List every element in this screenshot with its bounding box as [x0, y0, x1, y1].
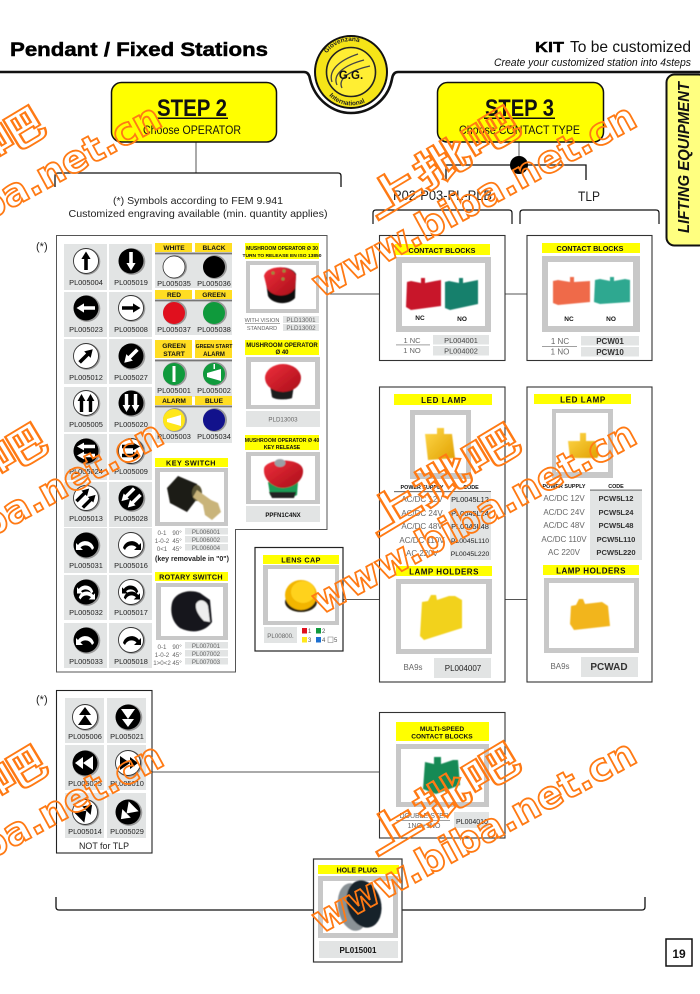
panel: LED lamp and holders standard: LAMP HOLDERS [409, 568, 479, 576]
panel: contact blocks standard: 1 NC [403, 336, 421, 345]
panel: multi-speed contact blocks: DOUBLE STEP [399, 813, 449, 820]
connector lines [152, 142, 527, 772]
panel: LED lamp and holders standard: AC/DC 48V [401, 522, 443, 531]
header rule curving around logo [0, 72, 700, 113]
panel: contact blocks TLP: NC [564, 316, 574, 323]
step 2 box: Choose OPERATOR [143, 123, 241, 137]
colour buttons: PL005001 [157, 386, 191, 395]
panel: hole plug: PL015001 [340, 946, 377, 955]
panel: LED lamp and holders standard: PL0045L12 [451, 495, 489, 504]
side tab: lifting equipment [666, 74, 700, 246]
symbol codes: PL005032 [69, 608, 103, 617]
panel: lens cap: PL00800. [267, 633, 294, 640]
step 2 note: Customized engraving available (min. quantity applies) [68, 208, 328, 220]
panel: contact blocks TLP: CONTACT BLOCKS [557, 244, 624, 253]
symbol codes: PL005031 [69, 561, 103, 570]
panel: operators [56, 236, 327, 672]
symbol codes: PL005019 [114, 278, 148, 287]
colour buttons: RED [167, 292, 181, 299]
rotary switch: 0-1 [158, 644, 167, 651]
panel: contact blocks standard: NO [457, 316, 467, 323]
watermark top right: www.biba.net.cn [304, 95, 643, 306]
panel: LED lamp and holders standard: PL0045L110 [451, 538, 489, 545]
panel: contact blocks standard: NC [415, 315, 425, 322]
watermark bottom right: 上批吧 [351, 726, 530, 867]
panel: LED lamp and holders TLP: BA9s [550, 662, 570, 671]
panel: LED lamp and holders standard: POWER SUPPLY [401, 485, 444, 491]
watermark top right: 上批吧 [351, 90, 530, 231]
panel: lens cap: 3 [308, 638, 312, 644]
kit heading: To be customized [570, 39, 691, 56]
logo: Giovenzana [324, 38, 360, 52]
symbol codes: PL005023 [69, 325, 103, 334]
rotary switch: PL007003 [192, 659, 221, 666]
panel: not for TLP symbols: PL005025 [68, 779, 102, 788]
step 2 box: STEP 2 [157, 95, 227, 122]
symbol codes: PL005013 [69, 514, 103, 523]
colour buttons: PL005034 [197, 432, 231, 441]
panel: LED lamp and holders TLP: LAMP HOLDERS [556, 566, 626, 576]
panel: LED lamp and holders standard: CODE [463, 485, 479, 491]
key switch: KEY SWITCH [166, 458, 216, 468]
panel: LED lamp and holders TLP: AC/DC 24V [543, 508, 585, 517]
step 2 bracket [55, 173, 341, 187]
symbol codes: PL005018 [114, 657, 148, 666]
symbol codes: PL005017 [114, 608, 148, 617]
panel: LED lamp and holders TLP [527, 387, 652, 682]
rotary switch: 45° [172, 660, 182, 667]
colour buttons: BLACK [202, 245, 226, 252]
rotary switch: PL007002 [192, 651, 221, 658]
mushroom operator 40: MUSHROOM OPERATOR [246, 343, 318, 349]
mushroom key release: KEY RELEASE [264, 445, 301, 451]
panel: contact blocks TLP: 1 NC [551, 337, 569, 346]
panel: contact blocks TLP: NO [606, 316, 616, 323]
rotary switch: 1>0<2 [153, 660, 171, 667]
key switch: 45° [172, 546, 182, 553]
panel: LED lamp and holders TLP: LED LAMP [560, 396, 606, 404]
colour buttons: PL005035 [157, 279, 191, 288]
panel: LED lamp and holders TLP: AC/DC 12V [543, 494, 585, 503]
colour buttons: PL005002 [197, 386, 231, 395]
panel: not for TLP symbols: PL005029 [110, 827, 144, 836]
rotary switch [153, 572, 228, 667]
panel: not for TLP symbols: PL005006 [68, 732, 102, 741]
panel: multi-speed contact blocks: 1NO+1NO [408, 823, 441, 830]
panel: not for TLP symbols: PL005010 [110, 779, 144, 788]
panel: lens cap: LENS CAP [281, 556, 321, 564]
step 3 box [438, 82, 604, 142]
mushroom operator 30 [242, 243, 322, 332]
panel: multi-speed contact blocks: MULTI-SPEED [420, 726, 464, 733]
panel: hole plug: HOLE PLUG [337, 868, 378, 874]
panel: contact blocks TLP [527, 236, 652, 360]
panel: not for TLP symbols: PL005014 [68, 827, 102, 836]
key switch: PL006002 [192, 537, 221, 544]
mushroom operator 40: Ø 40 [275, 350, 289, 356]
panel: lens cap: 2 [322, 629, 326, 635]
panel: hole plug [314, 859, 402, 962]
sub brackets [373, 210, 659, 224]
key switch: PL006004 [192, 545, 221, 552]
symbol codes: PL005027 [114, 373, 148, 382]
mushroom operator 40: PLD13003 [268, 416, 298, 424]
symbol codes: PL005033 [69, 657, 103, 666]
mushroom operator 30: PLD13001 [286, 317, 316, 324]
kit heading [494, 39, 691, 69]
step 2 box [112, 82, 276, 142]
mushroom operator 30: MUSHROOM OPERATOR Ø 30 [246, 246, 318, 252]
key switch: 0<1 [157, 546, 168, 553]
colour buttons: BLUE [205, 398, 224, 405]
label: TLP: TLP [578, 188, 600, 204]
label: P02-P03-PL-PLB: P02-P03-PL-PLB [393, 187, 492, 203]
rotary switch: 1-0-2 [155, 652, 170, 659]
asterisk note lower: (*) [36, 694, 48, 706]
panel: multi-speed contact blocks [380, 712, 505, 838]
colour buttons: PL005037 [157, 325, 191, 334]
rotary switch: ROTARY SWITCH [159, 572, 223, 582]
panel: LED lamp and holders standard: AC/DC 12V [401, 495, 443, 504]
mushroom operator 30: PLD13002 [286, 325, 316, 332]
step 2 note: (*) Symbols according to FEM 9.941 [113, 195, 283, 207]
panel: LED lamp and holders standard: AC/DC 24V [401, 509, 443, 518]
mushroom key release [245, 435, 320, 522]
panel: LED lamp and holders standard: PL0045L220 [451, 551, 489, 558]
kit heading: Create your customized station into 4steps [494, 57, 691, 69]
panel: LED lamp and holders TLP: CODE [608, 484, 624, 490]
panel: contact blocks standard: PL004001 [444, 336, 478, 345]
kit heading: KIT [535, 40, 564, 56]
mushroom operator 30: WITH VISION [245, 318, 279, 324]
panel: multi-speed contact blocks: CONTACT BLOCKS [411, 734, 473, 740]
panel: lens cap: 1 [308, 629, 312, 635]
key switch: 0-1 [158, 530, 167, 537]
panel: LED lamp and holders TLP: PCW5L12 [598, 494, 634, 503]
key switch: 45° [172, 538, 182, 545]
mushroom key release: MUSHROOM OPERATOR Ø 40 [245, 438, 319, 444]
panel: LED lamp and holders TLP: PCW5L48 [598, 521, 634, 530]
side tab: lifting equipment: LIFTING EQUIPMENT [676, 81, 693, 233]
symbol codes: PL005004 [69, 278, 103, 287]
symbol codes: PL005020 [114, 420, 148, 429]
panel: LED lamp and holders standard: LED LAMP [421, 396, 467, 405]
panel: not for TLP symbols [56, 690, 152, 853]
asterisk note upper: (*) [36, 241, 48, 253]
symbol codes: PL005008 [114, 325, 148, 334]
key switch: 90° [172, 530, 182, 537]
page number: 19 [672, 947, 686, 961]
symbol codes: PL005005 [69, 420, 103, 429]
panel: contact blocks standard [380, 236, 505, 360]
mushroom operator 30: TURN TO RELEASE EN ISO 13850 [242, 253, 322, 259]
panel: LED lamp and holders TLP: PCW5L220 [596, 548, 636, 557]
step 3 fork [446, 156, 586, 180]
rotary switch: PL007001 [192, 643, 221, 650]
key switch: (key removable in "0") [155, 556, 229, 563]
title: Pendant / Fixed Stations [10, 39, 268, 61]
panel: LED lamp and holders standard [380, 387, 505, 682]
panel: contact blocks TLP: PCW01 [596, 337, 624, 346]
watermark middle right: www.biba.net.cn [304, 412, 643, 623]
rotary switch: 90° [172, 644, 182, 651]
panel: LED lamp and holders standard: AC/DC 110V [399, 536, 445, 545]
symbol codes: PL005024 [69, 467, 103, 476]
panel: LED lamp and holders TLP: AC/DC 110V [541, 535, 587, 544]
panel: LED lamp and holders TLP: AC/DC 48V [543, 521, 585, 530]
panel: LED lamp and holders TLP: PCW5L24 [598, 508, 634, 517]
colour buttons [155, 243, 233, 443]
mushroom operator 40 [245, 340, 320, 427]
panel: LED lamp and holders standard: PL004007 [445, 664, 482, 673]
symbol icons [74, 248, 145, 654]
colour buttons: GREEN [202, 292, 226, 299]
colour buttons: PL005003 [157, 432, 191, 441]
colour buttons: PL005036 [197, 279, 231, 288]
logo [314, 35, 388, 109]
symbol codes: PL005009 [114, 467, 148, 476]
panel: LED lamp and holders TLP: AC 220V [548, 548, 581, 557]
symbol codes: PL005012 [69, 373, 103, 382]
panel: contact blocks standard: 1 NO [403, 346, 421, 355]
panel: LED lamp and holders standard: AC 220V [406, 549, 439, 558]
step 2 note [68, 195, 328, 220]
colour buttons: ALARM [203, 352, 225, 358]
panel: lens cap [255, 548, 343, 651]
panel: multi-speed contact blocks: PL004010 [456, 819, 488, 826]
logo: International [329, 92, 365, 106]
panel: LED lamp and holders standard: BA9s [403, 663, 423, 672]
step 3 box: Choose CONTACT TYPE [459, 123, 580, 137]
symbol codes: PL005016 [114, 561, 148, 570]
watermark bottom right: www.biba.net.cn [304, 731, 643, 942]
symbol tiles [64, 244, 152, 668]
colour buttons: START [163, 351, 185, 358]
panel: contact blocks standard: PL004002 [444, 346, 478, 356]
key switch [155, 458, 229, 563]
rotary switch: 45° [172, 652, 182, 659]
panel: contact blocks standard: CONTACT BLOCKS [409, 246, 476, 255]
colour buttons: GREEN [162, 343, 186, 350]
panel: LED lamp and holders TLP: POWER SUPPLY [543, 484, 586, 490]
panel: not for TLP symbols: NOT for TLP [79, 841, 129, 852]
panel: LED lamp and holders standard: PL0045L48 [451, 522, 489, 531]
colour buttons: ALARM [162, 398, 186, 405]
logo: G.G. [339, 70, 363, 82]
watermark middle right: 上批吧 [351, 407, 530, 548]
panel: lens cap: 5 [334, 638, 338, 644]
key switch: PL006001 [192, 529, 221, 536]
panel: LED lamp and holders TLP: PCW5L110 [597, 535, 635, 544]
panel: contact blocks TLP: PCW10 [596, 348, 624, 357]
mushroom key release: PPFN1C4NX [265, 513, 301, 519]
colour buttons: PL005038 [197, 325, 231, 334]
panel: not for TLP symbols: PL005021 [110, 732, 144, 741]
step 3 box: STEP 3 [485, 95, 554, 122]
colour buttons: GREEN START [196, 344, 233, 350]
key switch: 1-0-2 [155, 538, 170, 545]
panel: LED lamp and holders TLP: PCWAD [590, 662, 628, 673]
panel: lens cap: 4 [322, 638, 326, 644]
panel: contact blocks TLP: 1 NO [551, 348, 569, 356]
colour buttons: WHITE [163, 245, 185, 252]
page number [666, 939, 692, 966]
symbol codes [69, 278, 148, 666]
lower bracket [56, 897, 645, 910]
panel: LED lamp and holders standard: PL0045L24 [451, 509, 489, 518]
symbol codes: PL005028 [114, 514, 148, 523]
mushroom operator 30: STANDARD [247, 326, 277, 332]
